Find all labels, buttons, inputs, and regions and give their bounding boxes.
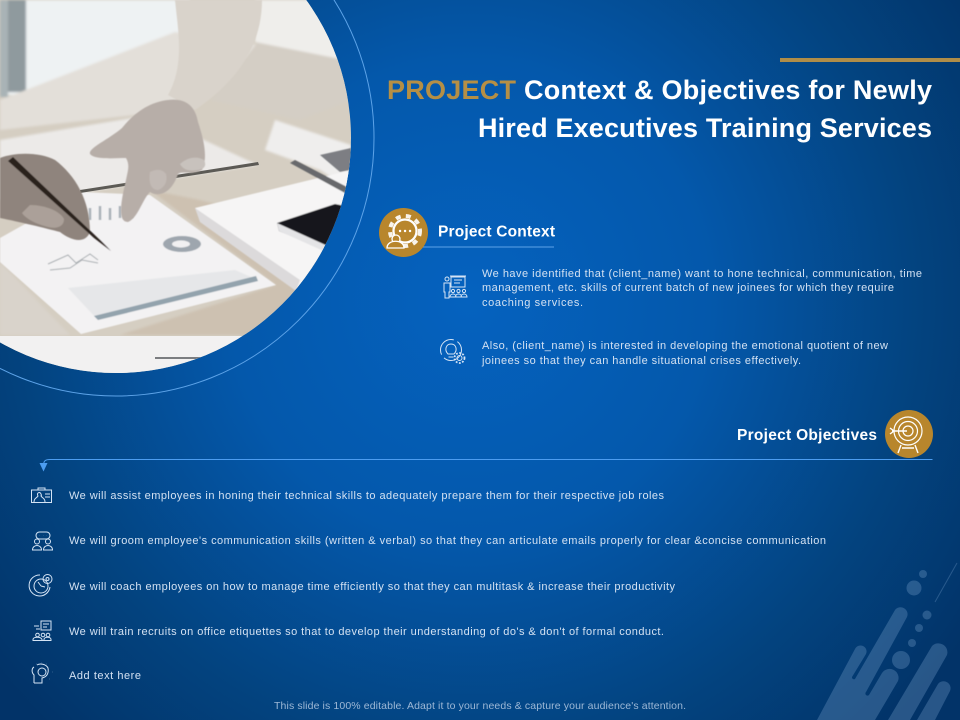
text: context paragraph 1: coaching services. <box>482 297 583 309</box>
objective 5: Add text here <box>69 670 141 682</box>
objective 2 <box>32 532 826 550</box>
photo: hands reviewing charts on a desk <box>0 0 370 380</box>
objective 4 <box>33 621 664 640</box>
footer note: This slide is 100% editable. Adapt it to your needs & capture your audience's attention. <box>274 700 686 712</box>
heading: project objectives: Project Objectives <box>737 427 877 444</box>
arrow: objectives divider pointing to list <box>40 460 932 472</box>
icon: target with arrow <box>885 410 933 458</box>
decorative corner shapes <box>817 563 957 720</box>
objective 3: We will coach employees on how to manage time efficiently so that they can multitask & increase their productivity <box>69 581 675 593</box>
desk line <box>80 162 259 193</box>
objective 5 <box>32 663 141 683</box>
title <box>387 75 932 143</box>
text: context paragraph 1 <box>482 268 922 309</box>
title: Hired Executives Training Services <box>478 113 932 143</box>
main document <box>0 192 276 334</box>
pointing arm and hand <box>90 0 262 222</box>
icon: id card <box>32 488 52 502</box>
icon: trainer with group <box>33 621 51 640</box>
text: context paragraph 2: Also, (client_name) is interested in developing the emotional quotient of new <box>482 340 888 352</box>
text: context paragraph 1: We have identified that (client_name) want to hone technical, communication, time <box>482 268 922 280</box>
text: context paragraph 2: joinees so that they can handle situational crises effectively. <box>481 355 801 367</box>
heading: project context: Project Context <box>438 224 555 240</box>
icon: bulb with gear <box>440 340 464 363</box>
objective 4: We will train recruits on office etiquettes so that to develop their understanding of do's & don't of formal conduct. <box>69 626 664 638</box>
title: PROJECT Context & Objectives for Newly <box>387 75 932 105</box>
icon: presenter with audience <box>444 276 467 298</box>
writing hand and pen <box>0 154 111 251</box>
title bar accent <box>780 58 960 62</box>
objective 1: We will assist employees in honing their technical skills to adequately prepare them for their respective job roles <box>69 490 664 502</box>
text: context paragraph 2 <box>481 340 888 367</box>
bottom sheet <box>0 336 242 373</box>
notebook and phone <box>195 148 351 291</box>
icon: two people talking <box>32 532 52 550</box>
icon: head with idea nodes <box>32 663 52 683</box>
heading: project objectives <box>737 410 933 458</box>
heading: project context <box>379 208 555 257</box>
icon: clock with gear <box>29 574 52 596</box>
icon: gear with speech and person <box>379 208 428 257</box>
decorative ring around photo <box>0 0 374 396</box>
objective 3 <box>29 574 675 596</box>
text: context paragraph 1: management, etc. skills of current batch of new joinees for which they require <box>482 282 894 294</box>
objective 2: We will groom employee's communication skills (written & verbal) so that they can articulate emails properly for clear &concise communication <box>69 535 826 547</box>
